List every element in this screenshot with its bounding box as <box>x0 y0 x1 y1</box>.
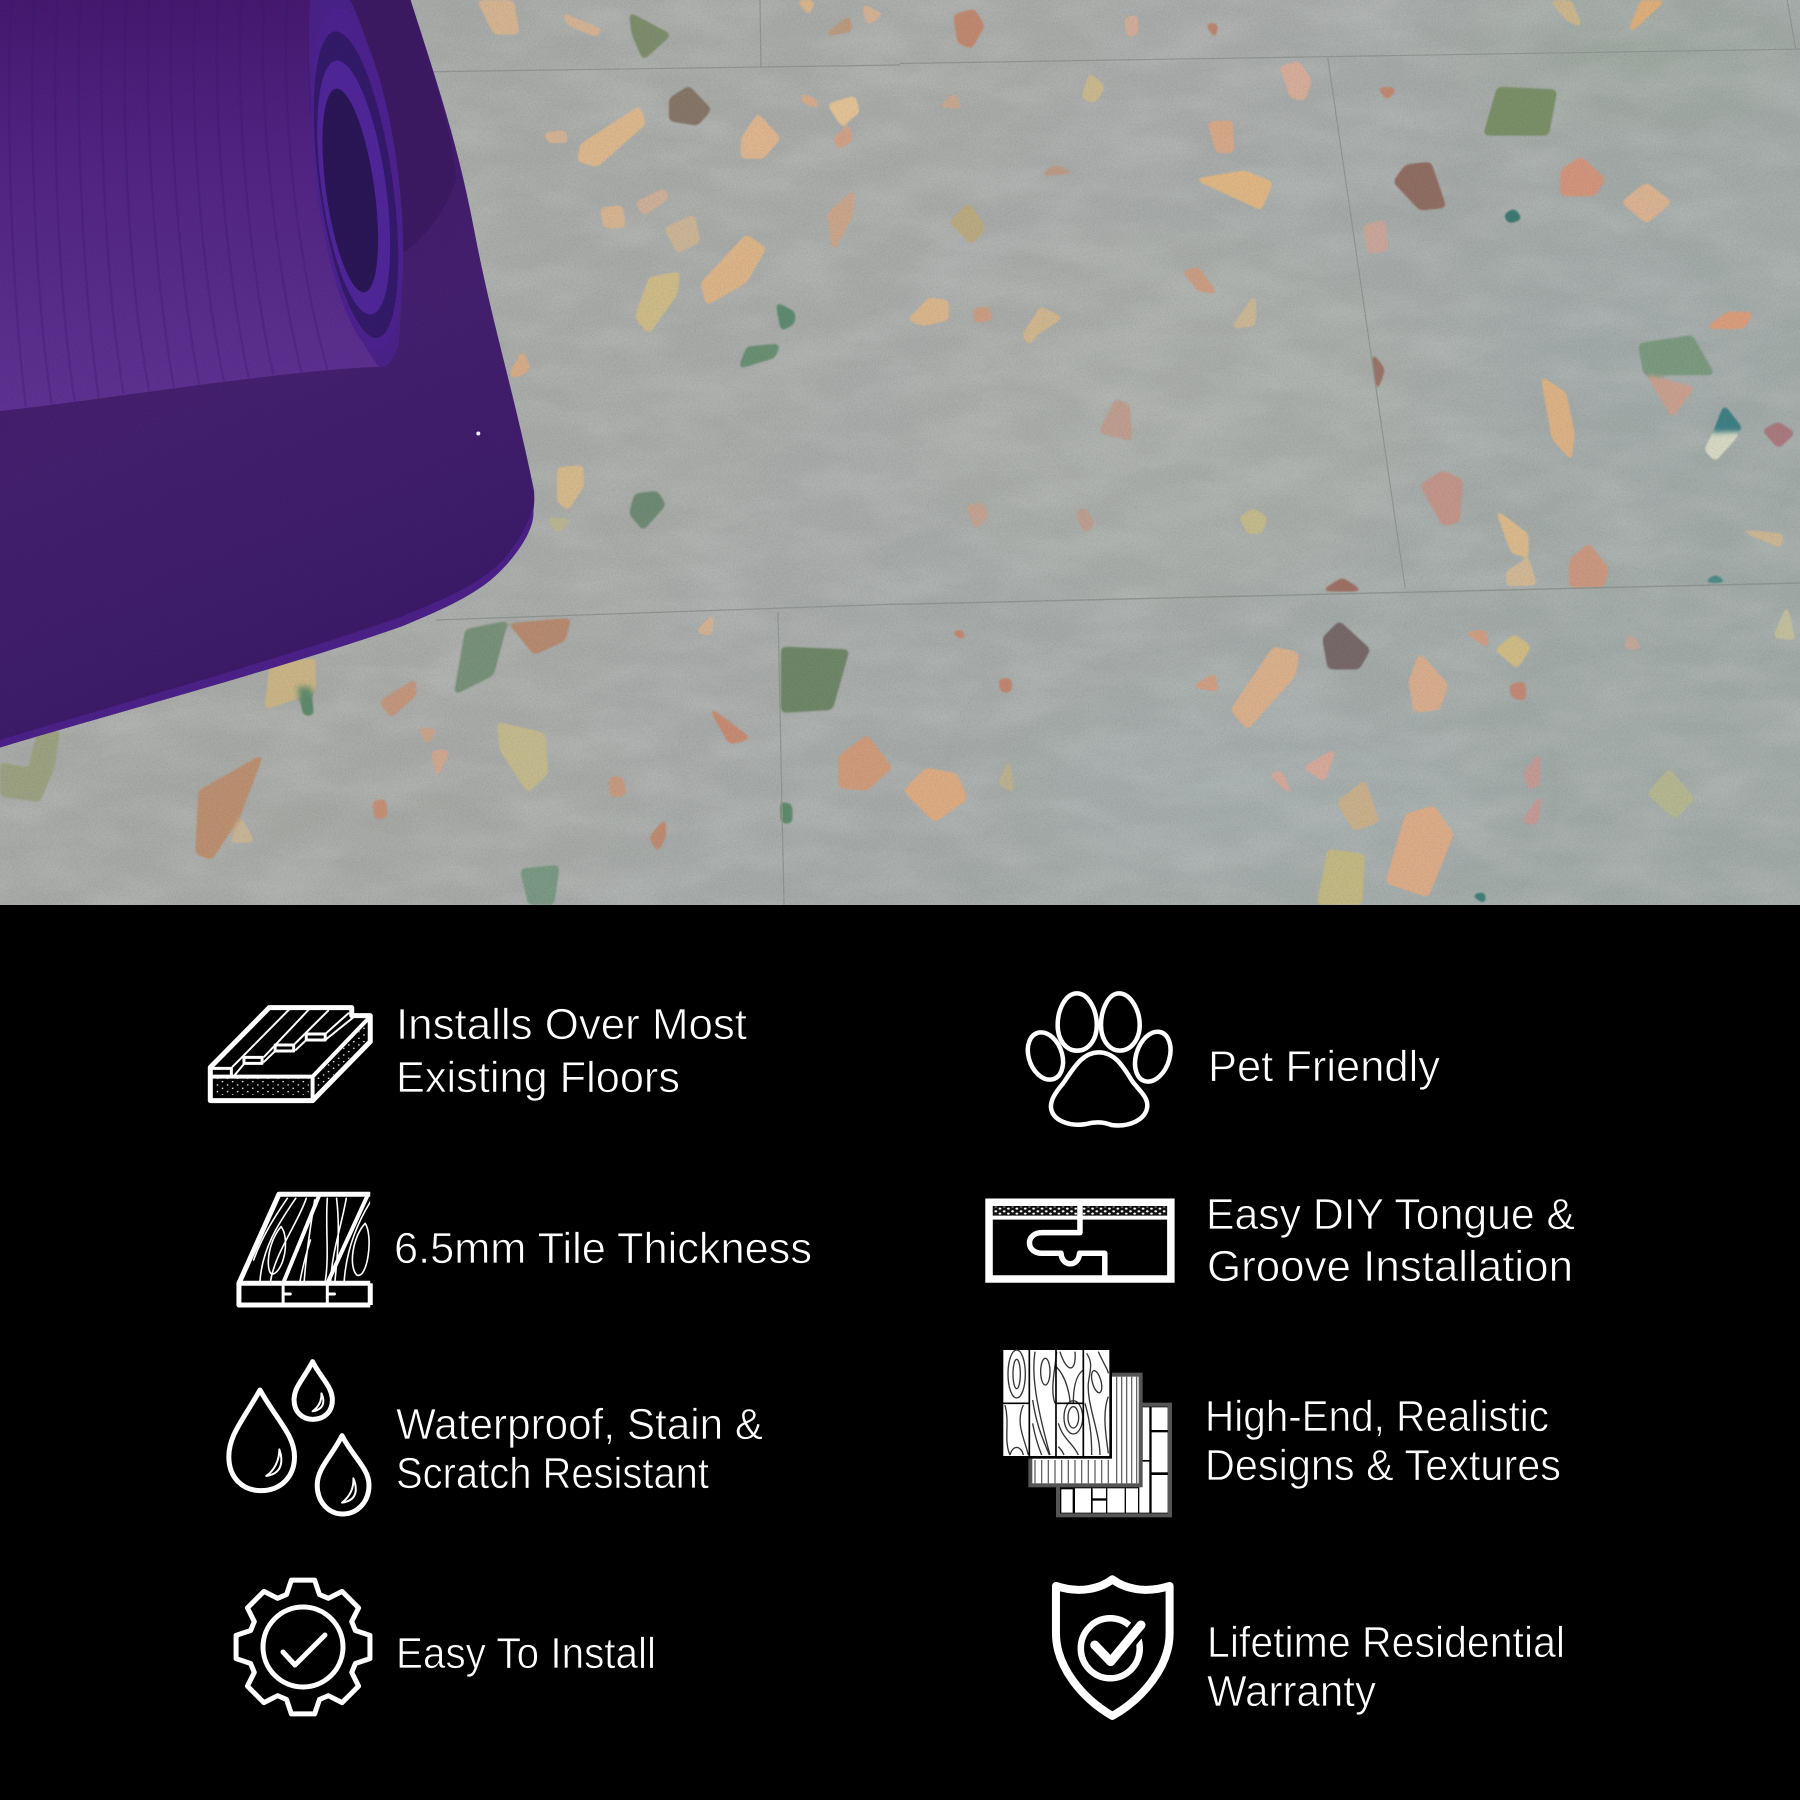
text: installs over most existing floors <box>396 1000 747 1102</box>
text: tile thickness: 6.5mm Tile Thickness <box>394 1224 812 1273</box>
feature: tile thickness <box>239 1194 812 1305</box>
purple yoga mat <box>0 0 534 747</box>
icon: layered floor block <box>210 1008 370 1101</box>
text: lifetime residential warranty <box>1207 1618 1565 1716</box>
feature: lifetime warranty <box>1056 1579 1565 1716</box>
feature: installs over most existing floors <box>210 1000 747 1102</box>
text: easy DIY tongue and groove installation <box>1206 1190 1575 1291</box>
text: installs over most existing floors: Installs Over Most <box>396 1000 747 1049</box>
feature: easy to install <box>236 1580 656 1714</box>
icon: tongue and groove joint <box>989 1202 1171 1279</box>
text: lifetime residential warranty: Lifetime Residential <box>1207 1618 1565 1667</box>
text: easy DIY tongue and groove installation: Groove Installation <box>1207 1242 1573 1291</box>
text: high-end realistic designs and textures: High-End, Realistic <box>1205 1392 1549 1441</box>
icon: gear with check <box>236 1580 370 1714</box>
text: easy to install: Easy To Install <box>396 1629 656 1678</box>
icon: wood plank cross-section <box>239 1194 372 1305</box>
text: installs over most existing floors: Existing Floors <box>396 1053 680 1102</box>
text: easy DIY tongue and groove installation: Easy DIY Tongue & <box>1206 1190 1575 1239</box>
icon: shield with check <box>1056 1579 1170 1716</box>
panel: black feature list <box>134 905 1574 1720</box>
feature: waterproof <box>229 1362 763 1514</box>
icon: water drops <box>229 1362 369 1514</box>
text: waterproof, stain and scratch resistant: Waterproof, Stain & <box>396 1400 763 1449</box>
panel: photo of purple yoga mat on terrazzo floor <box>0 0 1800 905</box>
text: lifetime residential warranty: Warranty <box>1207 1667 1376 1716</box>
text: pet friendly: Pet Friendly <box>1208 1042 1440 1091</box>
text: waterproof, stain and scratch resistant: Scratch Resistant <box>396 1449 709 1498</box>
left half of floor stones <box>0 0 893 905</box>
text: waterproof, stain and scratch resistant <box>396 1400 763 1498</box>
feature: tongue and groove <box>989 1190 1575 1291</box>
feature: pet friendly <box>1023 993 1440 1125</box>
right half of floor stones <box>903 0 1796 905</box>
text: high-end realistic designs and textures <box>1205 1392 1561 1490</box>
feature: realistic designs <box>1001 1348 1561 1515</box>
icon: paw print <box>1023 993 1176 1125</box>
text: high-end realistic designs and textures: Designs & Textures <box>1205 1441 1561 1490</box>
icon: stacked texture swatches <box>1001 1348 1170 1515</box>
